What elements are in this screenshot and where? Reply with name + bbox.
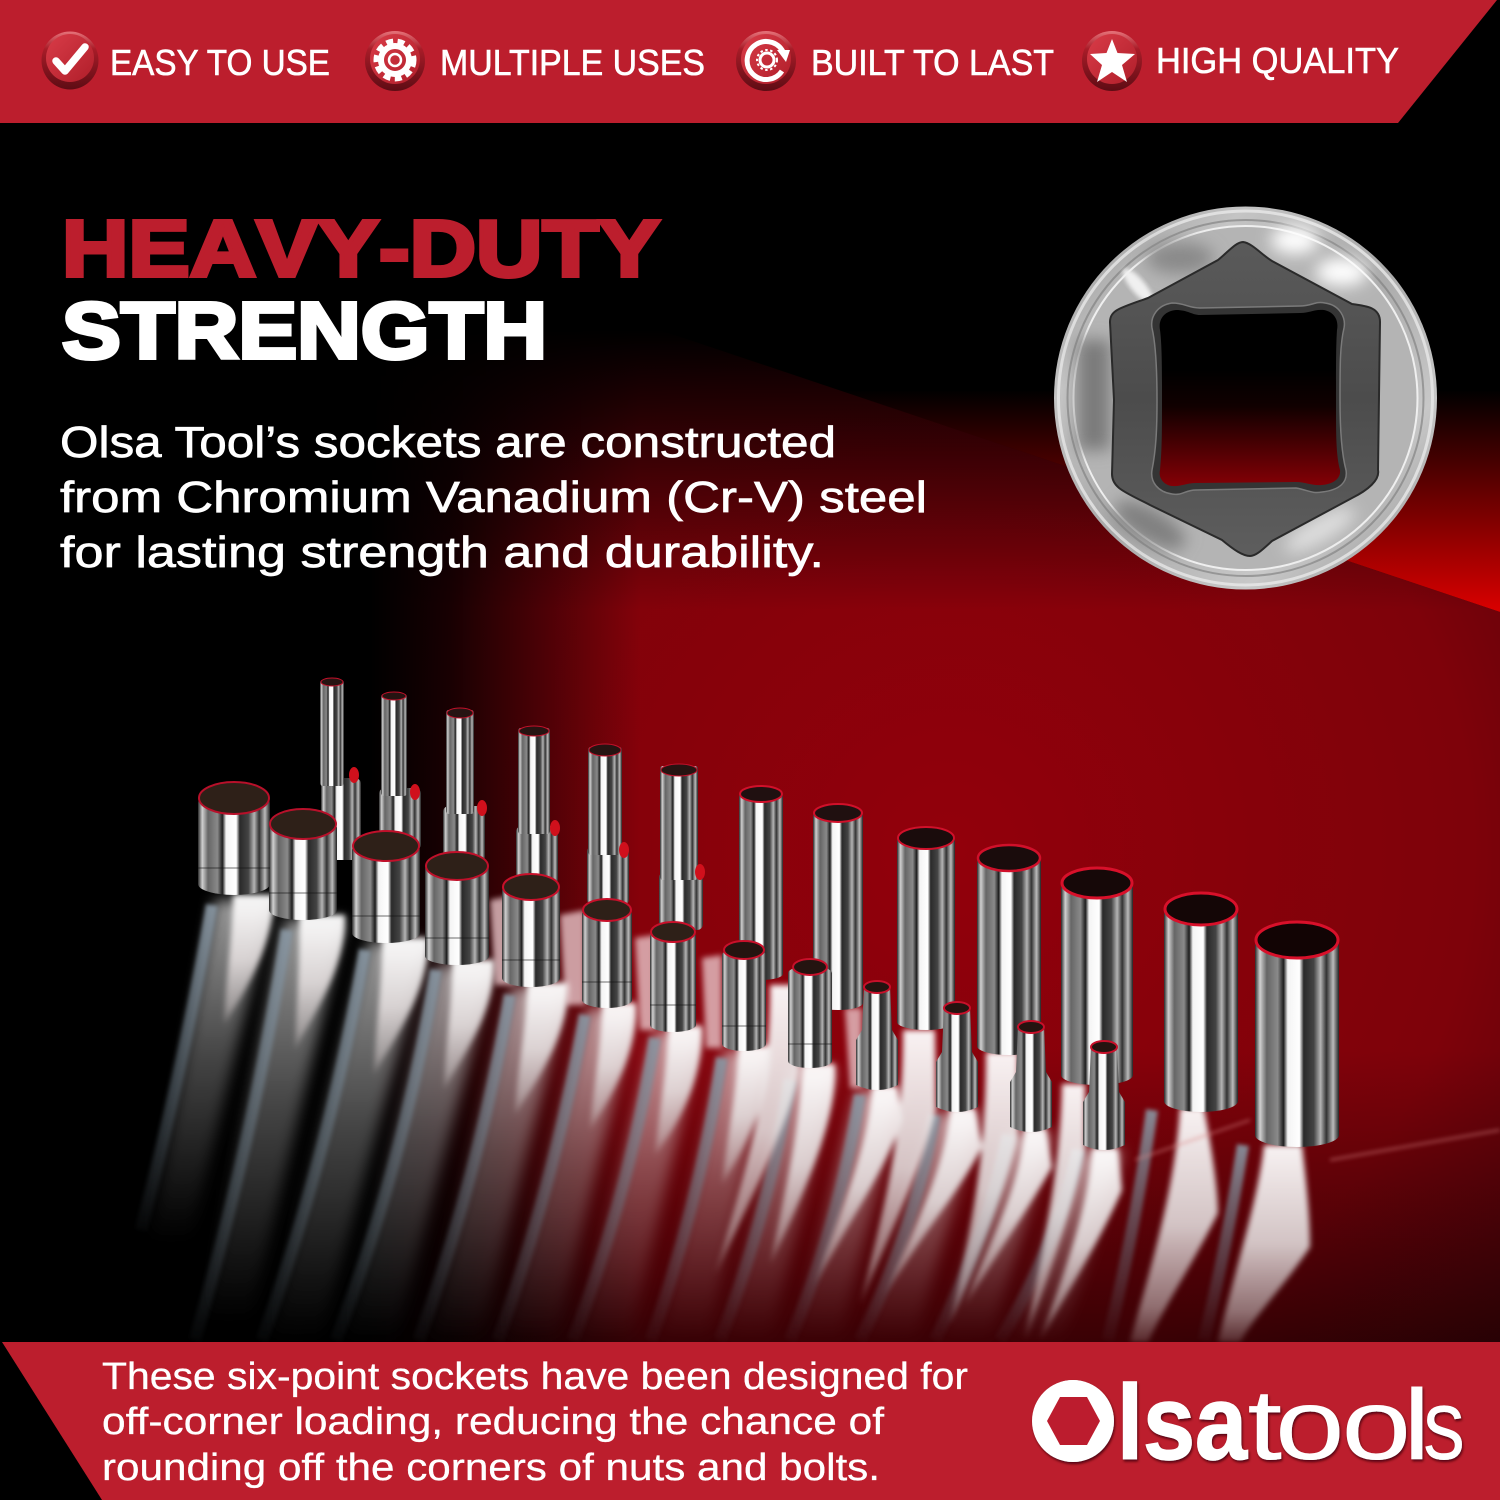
bottom banner xyxy=(2,1342,1500,1500)
bottom description text: off-corner loading, reducing the chance of xyxy=(102,1401,884,1443)
icon: gear badge xyxy=(365,31,425,91)
bottom description text: These six-point sockets have been designed for xyxy=(102,1356,968,1398)
feature: high quality xyxy=(1082,31,1399,91)
icon: circular arrow gear badge xyxy=(736,31,796,91)
body text xyxy=(60,418,927,577)
row of deep sockets (rear) xyxy=(320,678,1339,1147)
heading: HEAVY-DUTY xyxy=(62,204,660,293)
body text: for lasting strength and durability. xyxy=(60,528,824,577)
feature: multiple uses: MULTIPLE USES xyxy=(440,42,705,83)
feature: easy to use: EASY TO USE xyxy=(110,42,330,83)
feature: multiple uses xyxy=(365,31,705,91)
logo: Olsatools: tool xyxy=(1247,1369,1431,1481)
icon: check mark badge xyxy=(42,32,98,90)
bottom description text: rounding off the corners of nuts and bolts. xyxy=(102,1447,880,1489)
square drive opening xyxy=(1152,303,1346,494)
soft long reflection tails xyxy=(150,900,1122,1340)
feature: built to last: BUILT TO LAST xyxy=(811,42,1054,83)
heading: STRENGTH xyxy=(62,286,547,375)
surface scratch xyxy=(1135,1120,1500,1160)
white reflection blades xyxy=(224,895,1310,1342)
body text: from Chromium Vanadium (Cr-V) steel xyxy=(60,473,927,522)
logo: Olsatools: O xyxy=(1040,1360,1106,1472)
large socket end view xyxy=(1054,206,1437,590)
logo: Olsatools: s xyxy=(1423,1369,1465,1481)
logo: Olsatools: lsa xyxy=(1117,1364,1248,1482)
feature: high quality: HIGH QUALITY xyxy=(1156,40,1399,81)
stepped deep sockets xyxy=(320,678,705,930)
icon: star badge xyxy=(1082,31,1142,91)
top banner xyxy=(0,0,1497,123)
bottom description text xyxy=(102,1356,968,1489)
heading xyxy=(62,204,660,375)
straight deep sockets xyxy=(739,786,1339,1147)
socket outer chrome ring xyxy=(1054,206,1437,590)
body text: Olsa Tool’s sockets are constructed xyxy=(60,418,836,467)
pink glow behind rear sockets xyxy=(490,895,862,1088)
thin grey reflection lines xyxy=(141,905,1243,1340)
row of shallow sockets (front) xyxy=(198,782,1125,1150)
socket reflections on the surface xyxy=(141,895,1500,1342)
hexagonal drive recess xyxy=(1110,242,1380,556)
feature: built to last xyxy=(736,31,1054,91)
feature: easy to use xyxy=(42,32,330,90)
logo: Olsatools xyxy=(1032,1360,1465,1482)
